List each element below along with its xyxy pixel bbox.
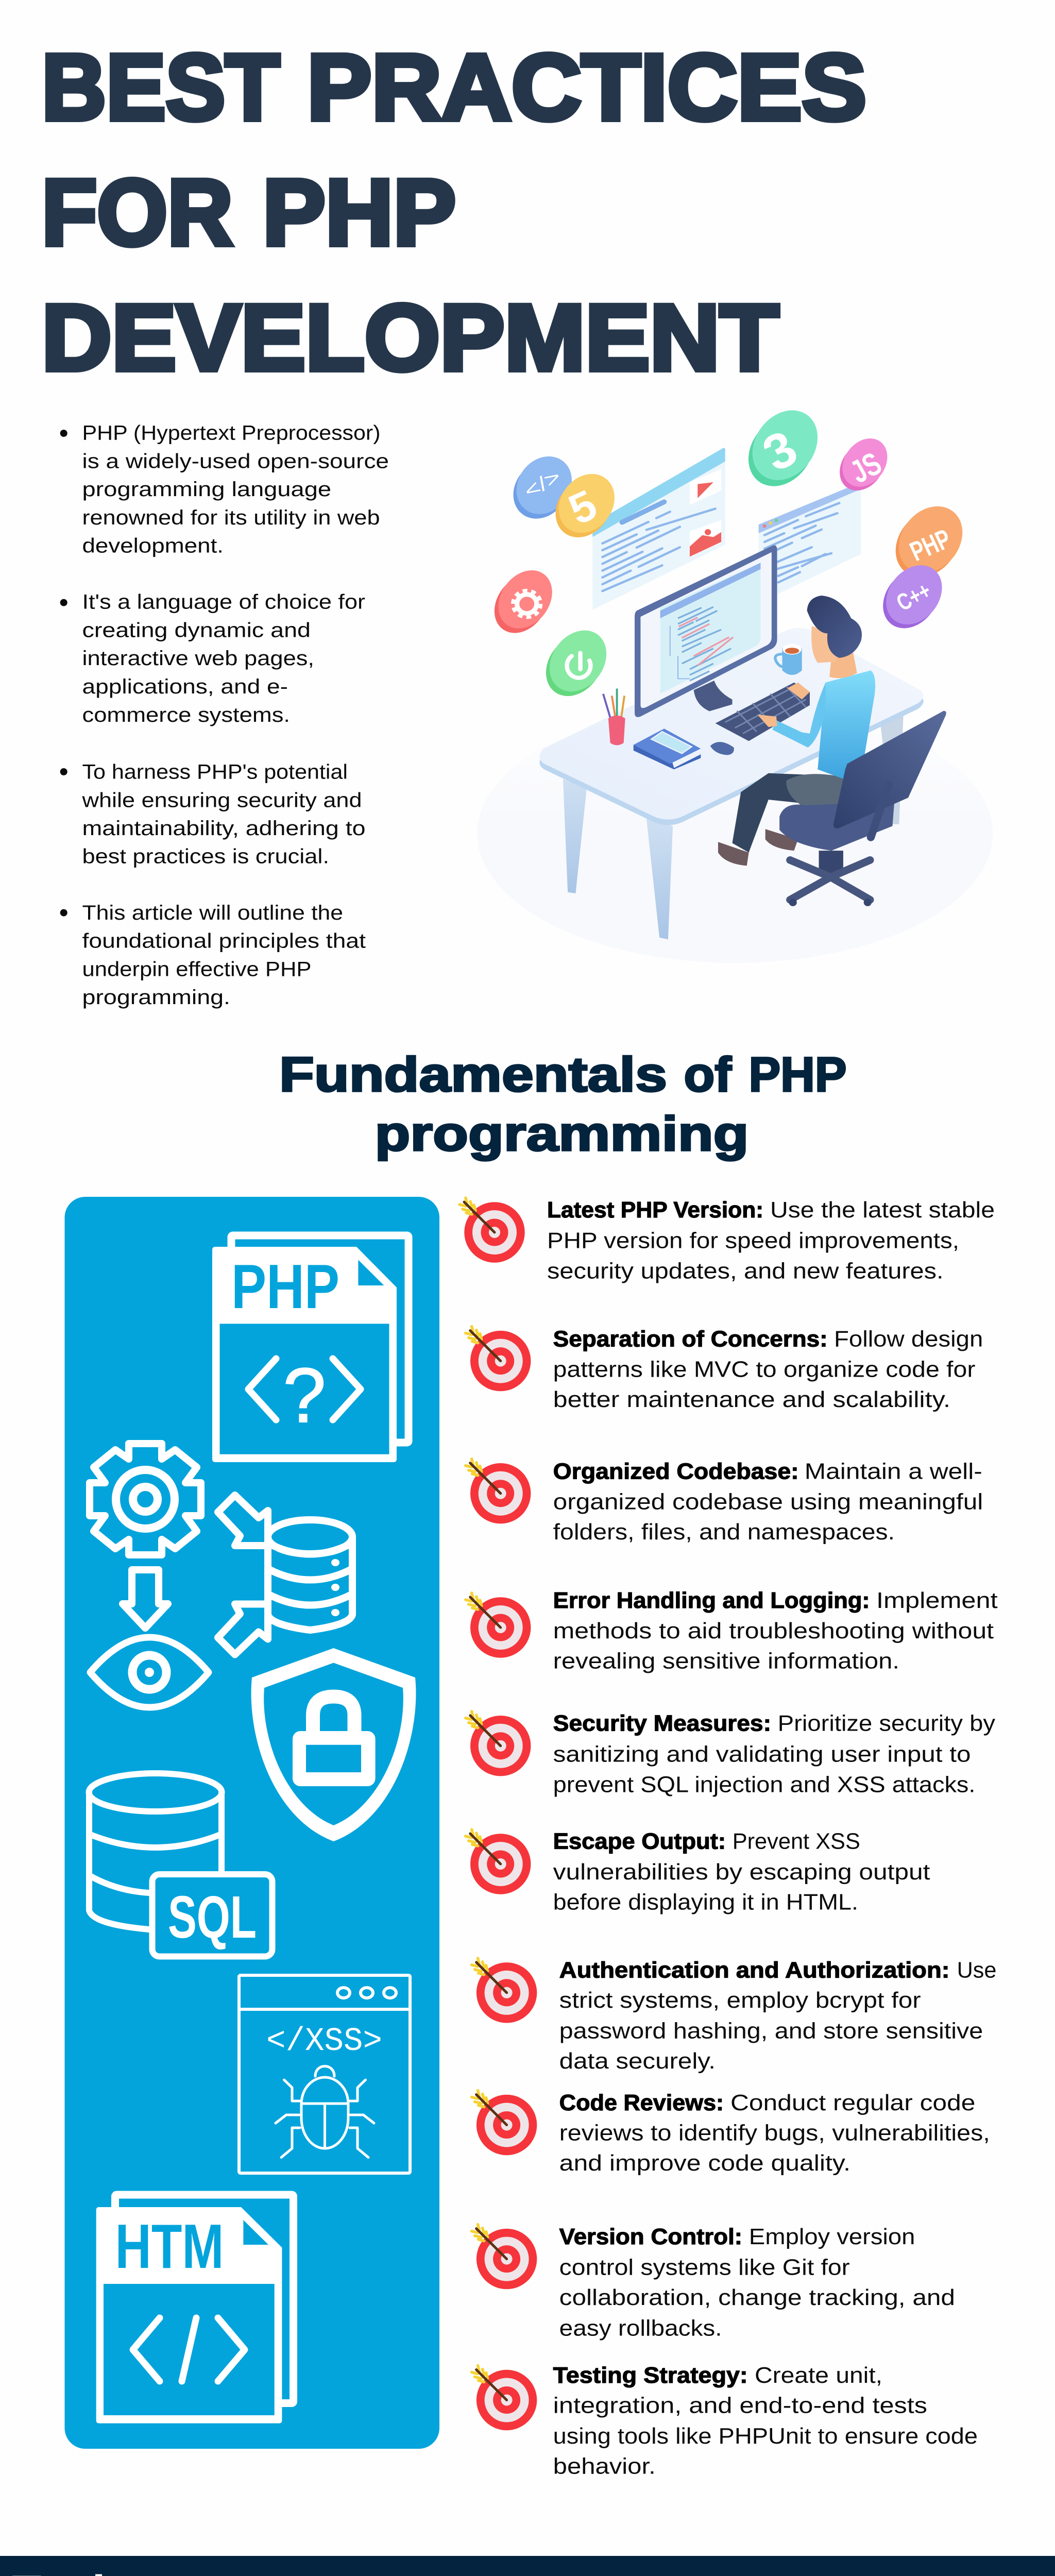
item: latest PHP version: security updates, and new features.: [547, 1259, 944, 1284]
icon: target: [472, 2366, 537, 2430]
item: version control: collaboration, change tracking, and: [559, 2285, 955, 2310]
mouse: [710, 742, 734, 755]
item: organized codebase: folders, files, and namespaces.: [553, 1519, 895, 1545]
item: code reviews: Conduct regular code: [730, 2090, 975, 2115]
item: separation of concerns: [466, 1326, 983, 1412]
icon: PHP file: [212, 1235, 409, 1462]
section heading: Fundamentals: [279, 1047, 667, 1102]
item: authentication and authorization: strict systems, employ bcrypt for: [559, 1988, 921, 2013]
footer bar: [0, 2556, 1055, 2576]
icon: c++ disc: C++: [892, 577, 935, 616]
item: security measures: prevent SQL injection and XSS attacks.: [553, 1772, 975, 1797]
bullet: article outline: foundational principles that: [82, 929, 366, 952]
item: security measures: sanitizing and validating user input to: [553, 1741, 971, 1767]
book and phone: [634, 728, 701, 769]
developer: [718, 596, 875, 866]
icon: php disc: [882, 495, 976, 588]
item: escape output: Prevent XSS: [733, 1829, 860, 1854]
icon: html5 disc: 5: [561, 481, 604, 534]
icon: target: [466, 1711, 531, 1776]
item: code reviews: Code Reviews:: [559, 2090, 724, 2115]
bullet: harness potential: best practices is crucial.: [82, 845, 329, 868]
icon: bug: [276, 2066, 374, 2158]
bullet: language of choice: It's a language of choice for: [82, 591, 365, 614]
item: security measures: Security Measures:: [553, 1711, 771, 1736]
bullet: what PHP is: PHP (Hypertext Preprocessor): [82, 422, 380, 445]
item: authentication and authorization: Use: [957, 1958, 996, 1982]
item: separation of concerns: patterns like MVC to organize code for: [553, 1357, 975, 1382]
item: version control: control systems like Git for: [559, 2255, 850, 2280]
item: error handling and logging: methods to aid troubleshooting without: [553, 1618, 994, 1643]
bullet: what PHP is: development.: [82, 534, 224, 557]
item: testing strategy: integration, and end-to-end tests: [553, 2393, 927, 2418]
bullet: article outline: This article will outline the: [82, 902, 343, 924]
item: latest PHP version: Latest PHP Version:: [547, 1197, 763, 1223]
icon: js disc: JS: [844, 446, 888, 490]
icon: SQL database: [89, 1773, 272, 1957]
item: escape output: vulnerabilities by escaping output: [553, 1859, 930, 1885]
item: organized codebase: [466, 1459, 983, 1545]
icon: css disc: [735, 399, 831, 498]
bullet: harness potential: To harness PHP's potential: [82, 760, 348, 783]
item: version control: Employ version: [749, 2224, 915, 2249]
icon: target: [466, 1327, 531, 1391]
title: PRACTICES: [307, 35, 866, 140]
office chair: [779, 711, 946, 906]
icon: XSS browser window: </XSS>: [266, 2023, 382, 2060]
bullet: what PHP is: is a widely-used open-source: [82, 450, 389, 473]
bullet: what PHP is: programming language: [82, 478, 331, 501]
section heading: programming: [375, 1107, 749, 1161]
icon: security shield: [251, 1648, 416, 1841]
bullet: harness potential: [60, 760, 365, 868]
section heading: PHP: [749, 1047, 847, 1102]
icon: XSS browser window: [239, 1975, 410, 2173]
floating window left: [592, 448, 725, 610]
item: escape output: Escape Output:: [553, 1829, 726, 1854]
keyboard: [716, 683, 810, 741]
icon: code disc: </>: [520, 465, 565, 502]
item: latest PHP version: PHP version for speed improvements,: [547, 1228, 959, 1253]
list: PHP fundamentals: [460, 1197, 998, 2479]
item: version control: easy rollbacks.: [559, 2316, 722, 2341]
icon: html5 disc: [544, 464, 626, 548]
icon: PHP file: ?: [283, 1352, 326, 1438]
bullet: what PHP is: renowned for its utility in web: [82, 506, 380, 529]
item: testing strategy: Testing Strategy:: [553, 2363, 747, 2388]
floating window right: [759, 482, 861, 603]
icon: settings disc: [484, 561, 563, 642]
item: organized codebase: organized codebase using meaningful: [553, 1489, 983, 1514]
item: testing strategy: [472, 2363, 978, 2479]
item: authentication and authorization: Authentication and Authorization:: [559, 1958, 950, 1982]
title: FOR: [42, 160, 233, 265]
item: security measures: [466, 1711, 995, 1797]
bullet: article outline: programming.: [82, 986, 230, 1009]
item: code reviews: and improve code quality.: [559, 2150, 850, 2176]
illustration: developer at desk: [477, 399, 993, 963]
item: code reviews: [472, 2090, 990, 2176]
item: organized codebase: Maintain a well-: [805, 1459, 982, 1484]
icon: code disc: [502, 446, 583, 529]
icon: target: [472, 1958, 537, 2023]
bullet: what PHP is: [60, 422, 389, 557]
title: [42, 35, 866, 390]
floor shadow: [477, 704, 993, 963]
title: BEST: [42, 35, 280, 140]
item: testing strategy: Create unit,: [755, 2363, 882, 2388]
item: version control: [472, 2224, 955, 2341]
bullet: language of choice: [60, 591, 365, 726]
item: code reviews: reviews to identify bugs, vulnerabilities,: [559, 2121, 990, 2146]
item: version control: Version Control:: [559, 2224, 742, 2249]
section heading: of: [684, 1047, 731, 1102]
intro bullet list: [60, 422, 389, 1009]
item: error handling and logging: revealing sensitive information.: [553, 1649, 899, 1674]
section heading: [279, 1047, 847, 1161]
icon: target: [472, 2091, 537, 2155]
bullet: language of choice: applications, and e-: [82, 675, 288, 698]
item: separation of concerns: Follow design: [834, 1326, 983, 1351]
icon: c++ disc: [872, 555, 954, 638]
bullet: language of choice: commerce systems.: [82, 704, 290, 726]
icon: power disc: [535, 620, 618, 706]
icon: target: [466, 1593, 531, 1658]
title: PHP: [263, 160, 456, 265]
icon: PHP file: PHP: [231, 1251, 339, 1321]
icon: HTM file: HTM: [115, 2211, 224, 2281]
item: latest PHP version: Use the latest stable: [770, 1197, 995, 1223]
item: error handling and logging: Error Handling and Logging:: [553, 1588, 870, 1613]
bullet: language of choice: interactive web pages,: [82, 647, 314, 670]
icon: php disc: PHP: [906, 523, 956, 567]
bullet: language of choice: creating dynamic and: [82, 619, 311, 642]
item: error handling and logging: Implement: [876, 1588, 998, 1613]
bullet: harness potential: maintainability, adhering to: [82, 817, 366, 840]
item: error handling and logging: [466, 1588, 998, 1674]
item: security measures: Prioritize security by: [778, 1711, 995, 1736]
monitor: [635, 545, 777, 717]
panel: blue icon column: [65, 1197, 439, 2449]
pencil cup: [603, 688, 625, 745]
title: DEVELOPMENT: [42, 285, 779, 390]
item: testing strategy: using tools like PHPUnit to ensure code: [553, 2424, 978, 2449]
item: escape output: before displaying it in HTML.: [553, 1890, 858, 1915]
item: escape output: [466, 1829, 930, 1915]
item: organized codebase: Organized Codebase:: [553, 1459, 799, 1484]
icon: target: [460, 1198, 525, 1263]
icon: SQL database: SQL: [168, 1884, 257, 1951]
item: authentication and authorization: data securely.: [559, 2048, 716, 2074]
arrow: gear to eye: [123, 1570, 168, 1628]
bullet: harness potential: while ensuring security and: [81, 789, 362, 811]
icon: target: [466, 1829, 531, 1894]
icon: gear: [90, 1444, 201, 1555]
item: authentication and authorization: [472, 1958, 996, 2074]
item: separation of concerns: better maintenance and scalability.: [553, 1387, 950, 1412]
coffee mug: [775, 644, 802, 675]
icon: HTM file: [96, 2195, 293, 2424]
icon: target: [472, 2225, 537, 2289]
item: authentication and authorization: password hashing, and store sensitive: [559, 2019, 983, 2043]
icon: target: [466, 1459, 531, 1523]
bullet: article outline: [60, 902, 366, 1009]
item: separation of concerns: Separation of Concerns:: [553, 1326, 827, 1351]
item: latest PHP version: [460, 1197, 995, 1284]
icon: eye: [90, 1637, 209, 1707]
bullet: article outline: underpin effective PHP: [82, 958, 311, 980]
icon: css disc: 3: [754, 420, 806, 482]
item: testing strategy: behavior.: [553, 2453, 656, 2479]
icon: database with arrows: [218, 1495, 352, 1655]
icon: js disc: [830, 430, 896, 499]
desk: [539, 628, 924, 939]
